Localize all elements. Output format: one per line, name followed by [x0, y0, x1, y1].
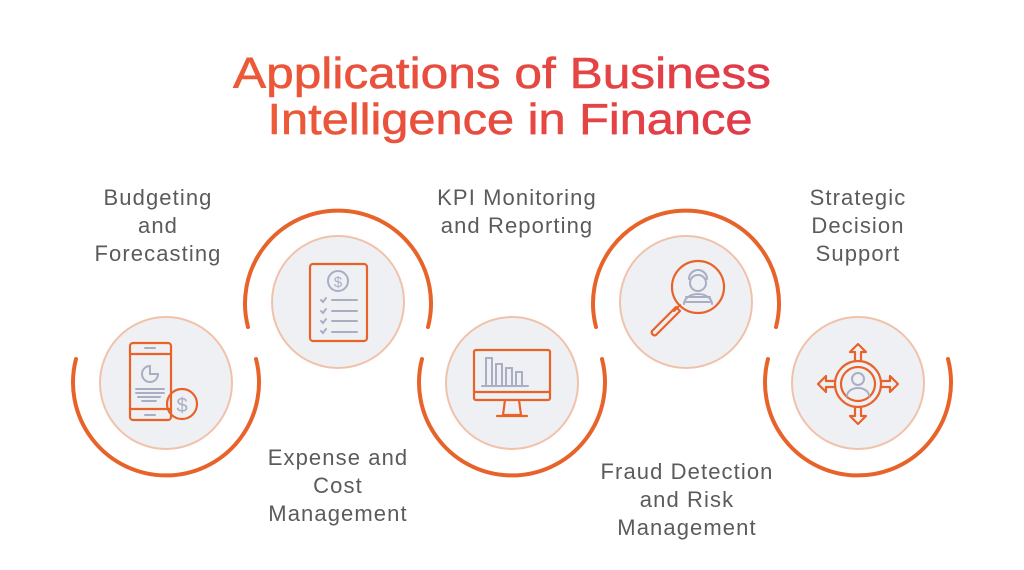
- label: strategic: Strategic: [810, 185, 906, 210]
- label: budgeting: and: [138, 213, 178, 238]
- title: [233, 49, 771, 144]
- label: fraud: Fraud Detection: [600, 459, 774, 484]
- node 5: strategic: [765, 317, 951, 475]
- label: strategic: Support: [816, 241, 900, 266]
- label: budgeting: Budgeting: [104, 185, 212, 210]
- label: budgeting: Forecasting: [94, 241, 222, 266]
- icon: phone with dollar: $: [176, 395, 188, 417]
- label: strategic: Decision: [811, 213, 905, 238]
- label: KPI: KPI Monitoring: [437, 185, 597, 210]
- node 3: KPI: [419, 317, 605, 475]
- title: Intelligence in Finance: [268, 95, 752, 144]
- icon: person with arrows: [818, 344, 898, 424]
- label: fraud: Management: [617, 515, 757, 540]
- icon: checklist document: [310, 264, 367, 341]
- icon: checklist document: $: [334, 274, 343, 291]
- node 2: expense: [245, 211, 431, 368]
- title: Applications of Business: [233, 49, 771, 98]
- label: expense: Management: [268, 501, 408, 526]
- label: fraud: and Risk: [640, 487, 734, 512]
- label: KPI: and Reporting: [441, 213, 593, 238]
- label: expense: Cost: [313, 473, 363, 498]
- icon: phone with dollar: [130, 343, 197, 420]
- label: expense: Expense and: [268, 445, 408, 470]
- node 4: fraud: [593, 211, 779, 368]
- icon: magnifier with person: [652, 261, 724, 335]
- node 1: budgeting: [73, 317, 259, 475]
- icon: monitor with bars: [474, 350, 550, 416]
